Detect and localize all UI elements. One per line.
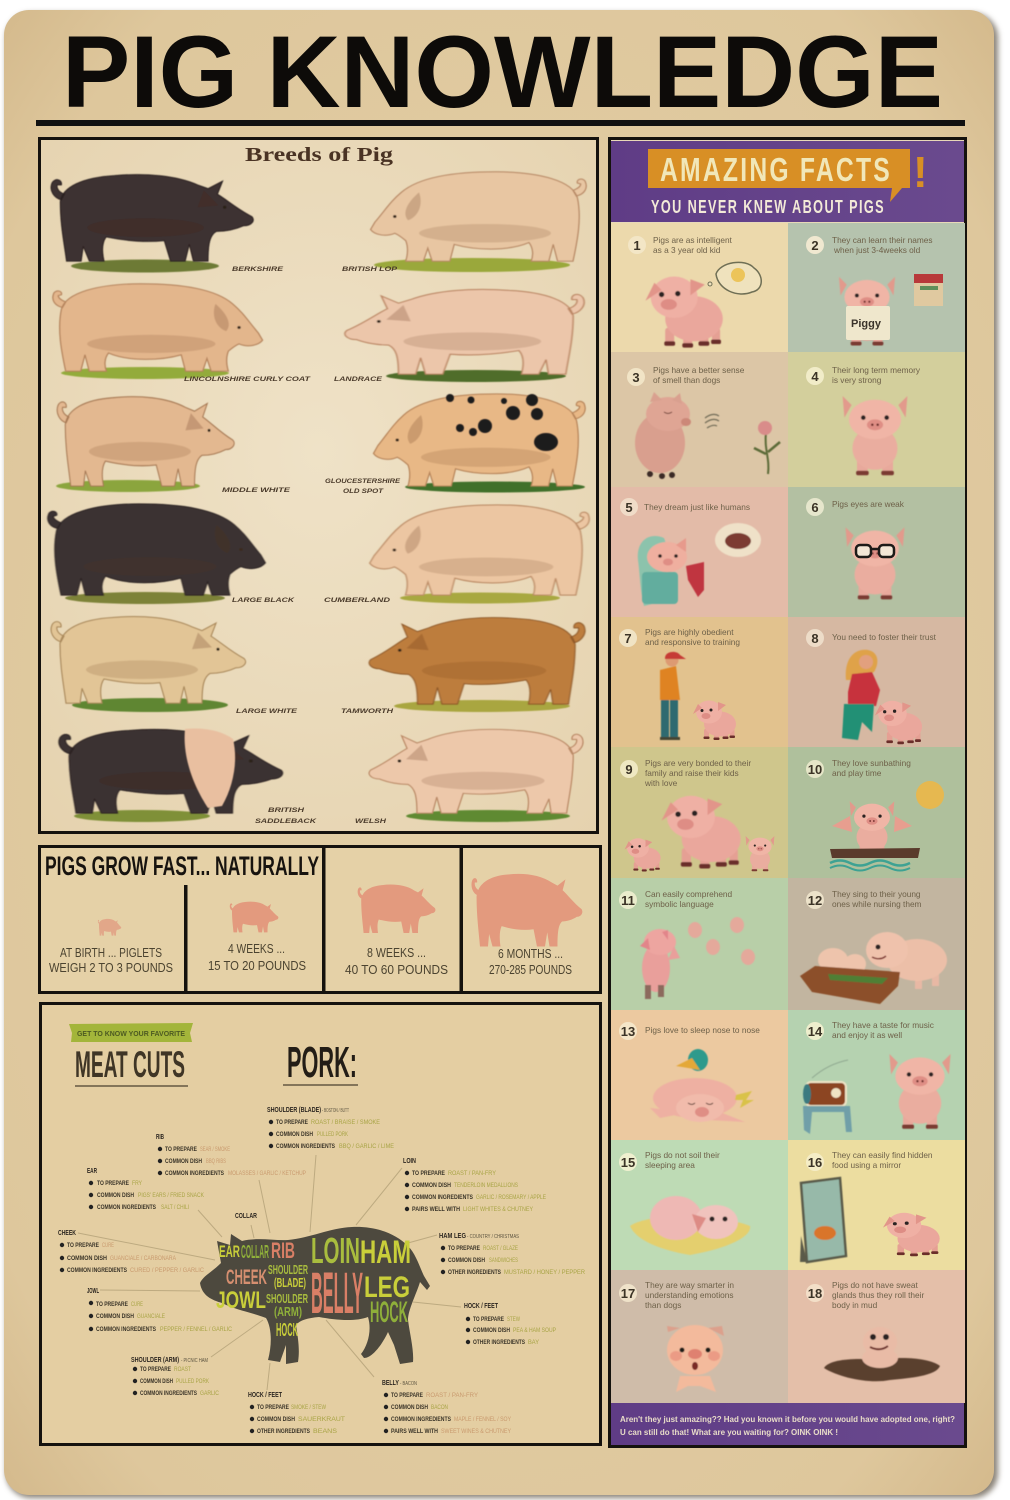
fact 12: [788, 878, 965, 1010]
header: amazing facts banner: !: [913, 148, 928, 197]
callout: ham leg: TO PREPARE: [448, 1245, 480, 1252]
pig: gloucestershire old spot: OLD SPOT: [343, 488, 384, 495]
heading: breeds of pig: Breeds of Pig: [245, 144, 394, 166]
callout: rib: COMMON INGREDIENTS: [165, 1170, 225, 1177]
fact 16: [788, 1140, 965, 1270]
callout: shoulder arm: ROAST: [174, 1367, 191, 1373]
callout: belly: TO PREPARE: [391, 1392, 423, 1399]
callout: jowl: COMMON INGREDIENTS: [96, 1326, 157, 1333]
callout: shoulder arm: - PICNIC HAM: [181, 1358, 208, 1364]
diagram: pork cuts pig: SHOULDER: [268, 1262, 308, 1277]
callout: cheek: GUANCIALE / CARBONARA: [110, 1256, 176, 1262]
callout: belly: PAIRS WELL WITH: [391, 1428, 438, 1435]
callout: shoulder arm: COMMON DISH: [140, 1378, 173, 1385]
callout: belly: MAPLE / FENNEL / SOY: [454, 1417, 511, 1423]
pig: welsh: [355, 729, 583, 825]
fact 9: family and raise their kids: [645, 768, 739, 778]
fact 9: Pigs are very bonded to their: [645, 758, 751, 768]
growth stage: 6 months: 270-285 POUNDS: [489, 962, 572, 977]
growth stage: at birth: AT BIRTH ... PIGLETS: [60, 945, 162, 960]
diagram: pork cuts pig: [200, 1227, 430, 1364]
fact 2: 2: [811, 238, 819, 253]
fact 12: They sing to their young: [832, 889, 921, 899]
callout: cheek: COMMON DISH: [67, 1255, 107, 1262]
pig: berkshire: BERKSHIRE: [232, 266, 284, 273]
callout: ear: PIGS' EARS / FRIED SNACK: [138, 1193, 204, 1199]
callout: ham leg: - COUNTRY / CHRISTMAS: [467, 1234, 520, 1240]
diagram: pork cuts pig: (BLADE): [274, 1275, 306, 1290]
growth stage: 4 weeks: [208, 902, 306, 973]
callout: shoulder blade: PULLED PORK: [317, 1132, 348, 1138]
fact 2: when just 3-4weeks old: [833, 245, 921, 255]
fact 14: They have a taste for music: [832, 1020, 934, 1030]
callout: hock feet right: [464, 1303, 556, 1346]
callout: ham leg: MUSTARD / HONEY / PEPPER: [504, 1270, 586, 1276]
callout: shoulder blade: COMMON DISH: [276, 1131, 313, 1138]
fact 5: They dream just like humans: [644, 502, 750, 512]
callout: ear: [87, 1168, 204, 1211]
diagram: pork cuts pig: HAM: [360, 1234, 411, 1270]
diagram: pork cuts pig: HOCK: [370, 1296, 408, 1329]
fact 9: with love: [644, 778, 678, 788]
growth stage: at birth: WEIGH 2 TO 3 POUNDS: [49, 960, 173, 975]
panel: amazing facts: [610, 138, 966, 1446]
fact 15: Pigs do not soil their: [645, 1150, 720, 1160]
diagram: pork cuts pig: LEG: [364, 1271, 410, 1304]
callout: hock feet lower: TO PREPARE: [257, 1404, 289, 1411]
callout: cheek: CURE: [102, 1243, 114, 1249]
pig: british lop: BRITISH LOP: [342, 266, 398, 273]
fact 17: [611, 1270, 788, 1403]
callout: loin: TENDERLOIN MEDALLIONS: [454, 1183, 518, 1189]
fact 14: and enjoy it as well: [832, 1030, 902, 1040]
fact 11: symbolic language: [645, 899, 714, 909]
callout: ham leg: OTHER INGREDIENTS: [448, 1269, 502, 1276]
fact 2: [788, 223, 965, 352]
fact 16: They can easily find hidden: [832, 1150, 933, 1160]
fact 1: as a 3 year old kid: [653, 245, 721, 255]
callout: loin: TO PREPARE: [412, 1170, 446, 1177]
growth stage: 8 weeks: [345, 885, 448, 977]
callout: ham leg: ROAST / GLAZE: [483, 1246, 518, 1252]
fact 18: glands thus they roll their: [832, 1290, 924, 1300]
pig: lincolnshire curly coat: LINCOLNSHIRE CURLY COAT: [184, 376, 311, 383]
title: PIG KNOWLEDGE: [62, 15, 943, 129]
pig: large black: [48, 504, 296, 604]
callout: jowl: CURE: [131, 1302, 143, 1308]
callout: ear: FRY: [132, 1181, 142, 1187]
fact 17: 17: [621, 1286, 635, 1301]
fact 2: Piggy: [851, 318, 882, 330]
diagram: pork cuts pig: LOIN: [311, 1230, 360, 1271]
fact 13: 13: [621, 1024, 635, 1039]
footer message: U can still do that! What are you waiting for? OINK OINK !: [620, 1428, 838, 1437]
fact 6: [788, 487, 965, 617]
fact 10: [788, 747, 965, 878]
header: amazing facts banner: YOU NEVER KNEW ABOUT PIGS: [651, 197, 885, 217]
callout: hock feet right: STEW: [507, 1317, 520, 1323]
growth stage: at birth: [49, 919, 173, 975]
pig: large white: LARGE WHITE: [236, 708, 298, 715]
callout: belly: - BACON: [400, 1381, 417, 1387]
fact 17: They are way smarter in: [645, 1280, 734, 1290]
callout: ear: SALT / CHILI: [161, 1205, 189, 1211]
callout: ear: EAR: [87, 1168, 97, 1175]
pig: cumberland: [324, 505, 589, 604]
callout: shoulder arm: PULLED PORK: [176, 1379, 209, 1385]
callout: hock feet lower: OTHER INGREDIENTS: [257, 1428, 311, 1435]
footer message: Aren't they just amazing?? Had you known it before you would have adopted one, right?: [620, 1415, 955, 1424]
fact 4: [788, 352, 965, 487]
diagram: pork cuts pig: JOWL: [216, 1287, 266, 1314]
callout: belly: BELLY: [382, 1380, 399, 1387]
callout: rib: TO PREPARE: [165, 1146, 197, 1153]
callout: loin: LOIN: [403, 1158, 416, 1165]
pig: lincolnshire curly coat: [53, 284, 311, 383]
fact 10: and play time: [832, 768, 882, 778]
header: amazing facts banner: [611, 141, 964, 222]
fact 4: Their long term memory: [832, 365, 921, 375]
callout: loin: LIGHT WHITES & CHUTNEY: [463, 1207, 533, 1213]
diagram: pork cuts pig: HOCK: [276, 1320, 298, 1340]
diagram: pork cuts pig: RIB: [271, 1238, 295, 1263]
callout: cheek: TO PREPARE: [67, 1242, 99, 1249]
callout: belly: COMMON DISH: [391, 1404, 428, 1411]
pig: cumberland: CUMBERLAND: [324, 597, 390, 604]
fact 8: You need to foster their trust: [832, 632, 937, 642]
pig: middle white: MIDDLE WHITE: [222, 487, 291, 494]
callout: rib: RIB: [156, 1134, 164, 1141]
callout: jowl: TO PREPARE: [96, 1301, 128, 1308]
fact 15: [611, 1140, 788, 1270]
pig: tamworth: TAMWORTH: [341, 708, 393, 715]
callout: belly: ROAST / PAN-FRY: [426, 1393, 478, 1399]
callout: belly: BACON: [431, 1405, 448, 1411]
callout: shoulder arm: GARLIC: [200, 1391, 220, 1397]
fact 8: [788, 617, 965, 747]
callout: jowl: COMMON DISH: [96, 1313, 134, 1320]
pig: large black: LARGE BLACK: [232, 597, 296, 604]
fact 11: 11: [621, 893, 635, 908]
callout: hock feet right: BAY: [528, 1340, 539, 1346]
fact 12: ones while nursing them: [832, 899, 922, 909]
fact 17: understanding emotions: [645, 1290, 734, 1300]
callout: belly: [382, 1380, 511, 1435]
fact 4: is very strong: [832, 375, 882, 385]
fact 5: 5: [625, 500, 633, 515]
fact 5: [611, 487, 788, 617]
callout: collar: COLLAR: [235, 1213, 257, 1220]
callout: ear: TO PREPARE: [97, 1180, 129, 1187]
panel: breeds of pig: [40, 138, 598, 832]
callout: hock feet lower: SAUERKRAUT: [298, 1417, 345, 1423]
diagram: pork cuts pig: COLLAR: [241, 1242, 269, 1262]
callout: cheek: COMMON INGREDIENTS: [67, 1267, 128, 1274]
callout: shoulder blade: [267, 1107, 394, 1150]
callout: hock feet lower: HOCK / FEET: [248, 1392, 283, 1399]
callout: jowl: PEPPER / FENNEL / GARLIC: [160, 1327, 233, 1333]
callout: loin: COMMON DISH: [412, 1182, 451, 1189]
fact 18: 18: [808, 1286, 822, 1301]
callout: shoulder blade: COMMON INGREDIENTS: [276, 1143, 336, 1150]
callout: rib: MOLASSES / GARLIC / KETCHUP: [228, 1171, 306, 1177]
callout: hock feet right: PEA & HAM SOUP: [513, 1328, 556, 1334]
fact 11: Can easily comprehend: [645, 889, 733, 899]
pig: gloucestershire old spot: [325, 394, 585, 495]
fact 14: 14: [808, 1024, 823, 1039]
callout: ham leg: SANDWICHES: [489, 1258, 518, 1264]
panel: pork meat cuts: [40, 1004, 600, 1444]
fact 9: [611, 747, 788, 878]
fact 13: Pigs love to sleep nose to nose: [645, 1025, 760, 1035]
panel: pigs grow fast naturally: [40, 846, 600, 992]
growth stage: 6 months: [471, 874, 582, 977]
fact 1: 1: [633, 238, 641, 253]
callout: loin: ROAST / PAN-FRY: [448, 1171, 496, 1177]
pig: british saddleback: BRITISH: [268, 807, 304, 814]
callout: shoulder blade: ROAST / BRAISE / SMOKE: [311, 1120, 380, 1126]
pig: british lop: [342, 172, 586, 273]
fact 10: 10: [808, 762, 822, 777]
fact 8: 8: [811, 631, 819, 646]
fact 16: 16: [808, 1155, 822, 1170]
pig: berkshire: [51, 175, 284, 273]
growth stage: 8 weeks: 8 WEEKS ...: [367, 945, 426, 960]
callout: cheek: CHEEK: [58, 1230, 76, 1237]
fact 17: than dogs: [645, 1300, 681, 1310]
fact 3: Pigs have a better sense: [653, 365, 745, 375]
fact 7: 7: [624, 631, 632, 646]
fact 7: Pigs are highly obedient: [645, 627, 734, 637]
callout: jowl: GUANCIALE: [137, 1314, 165, 1320]
diagram: pork cuts pig: CHEEK: [226, 1266, 267, 1289]
callout: hock feet right: HOCK / FEET: [464, 1303, 499, 1310]
fact 9: 9: [625, 762, 633, 777]
fact 1: [611, 223, 788, 352]
fact 13: [611, 1010, 788, 1140]
diagram: pork cuts pig: SHOULDER: [266, 1291, 308, 1306]
banner: get to know your favorite: GET TO KNOW YOUR FAVORITE: [77, 1031, 185, 1038]
callout: ear: COMMON INGREDIENTS: [97, 1204, 157, 1211]
pig: landrace: LANDRACE: [334, 376, 383, 383]
fact 11: [611, 878, 788, 1010]
callout: belly: SWEET WINES & CHUTNEY: [441, 1429, 511, 1435]
callout: shoulder arm: TO PREPARE: [140, 1366, 171, 1373]
diagram: pork cuts pig: EAR: [219, 1242, 240, 1261]
callout: shoulder arm: SHOULDER (ARM): [131, 1357, 179, 1364]
callout: shoulder arm: COMMON INGREDIENTS: [140, 1390, 197, 1397]
fact 18: [788, 1270, 965, 1403]
banner: get to know your favorite: [69, 1023, 193, 1042]
fact 7: [611, 617, 788, 747]
footer message: [611, 1403, 964, 1445]
growth stage: 8 weeks: 40 TO 60 POUNDS: [345, 962, 448, 977]
pig: british saddleback: SADDLEBACK: [255, 818, 318, 825]
fact 6: Pigs eyes are weak: [832, 499, 905, 509]
growth stage: 4 weeks: 15 TO 20 POUNDS: [208, 958, 306, 973]
callout: jowl: [87, 1288, 233, 1333]
pig: gloucestershire old spot: GLOUCESTERSHIRE: [325, 478, 401, 485]
callout: loin: GARLIC / ROSEMARY / APPLE: [476, 1195, 546, 1201]
callout: hock feet lower: SMOKE / STEW: [291, 1405, 326, 1411]
fact 10: They love sunbathing: [832, 758, 911, 768]
callout: rib: [156, 1134, 306, 1177]
callout: hock feet right: TO PREPARE: [473, 1316, 504, 1323]
heading: pigs grow fast: PIGS GROW FAST... NATURALLY: [45, 851, 319, 881]
fact 15: 15: [621, 1155, 635, 1170]
pig: large white: [51, 617, 298, 715]
pig: british saddleback: [59, 728, 318, 825]
callout: jowl: JOWL: [87, 1288, 99, 1295]
callout: belly: COMMON INGREDIENTS: [391, 1416, 452, 1423]
fact 12: 12: [808, 893, 822, 908]
callout: hock feet lower: [248, 1392, 345, 1435]
pig: tamworth: [341, 618, 585, 715]
pig: welsh: WELSH: [355, 818, 386, 825]
pig: landrace: [334, 289, 584, 383]
callout: rib: BBQ RIBS: [206, 1159, 226, 1165]
fact 2: They can learn their names: [832, 235, 933, 245]
fact 1: Pigs are as intelligent: [653, 235, 733, 245]
callout: ham leg: COMMON DISH: [448, 1257, 485, 1264]
fact 3: [611, 352, 788, 487]
callout: shoulder blade: SHOULDER (BLADE): [267, 1107, 321, 1114]
fact 3: of smell than dogs: [653, 375, 720, 385]
diagram: pork cuts pig: BELLY: [311, 1261, 363, 1326]
callout: hock feet right: OTHER INGREDIENTS: [473, 1339, 525, 1346]
callout: shoulder blade: TO PREPARE: [276, 1119, 308, 1126]
callout: ear: COMMON DISH: [97, 1192, 134, 1199]
callout: cheek: CURED / PEPPER / GARLIC: [130, 1268, 205, 1274]
callout: hock feet lower: BEANS: [313, 1429, 337, 1435]
callout: ham leg: [439, 1233, 586, 1276]
fact 6: 6: [811, 500, 819, 515]
fact 16: food using a mirror: [832, 1160, 901, 1170]
fact 14: [788, 1010, 965, 1140]
panel: pork meat cuts: PORK:: [287, 1038, 357, 1087]
callout: hock feet right: COMMON DISH: [473, 1327, 510, 1334]
callout: loin: COMMON INGREDIENTS: [412, 1194, 474, 1201]
header: amazing facts banner: AMAZING FACTS: [660, 151, 892, 188]
callout: cheek: [58, 1230, 205, 1274]
callout: hock feet lower: COMMON DISH: [257, 1416, 295, 1423]
fact 4: 4: [811, 369, 819, 384]
fact 18: body in mud: [832, 1300, 878, 1310]
growth stage: 4 weeks: 4 WEEKS ...: [228, 941, 285, 956]
fact 15: sleeping area: [645, 1160, 695, 1170]
callout: rib: COMMON DISH: [165, 1158, 202, 1165]
fact 3: 3: [632, 370, 640, 385]
growth stage: 6 months: 6 MONTHS ...: [498, 946, 563, 961]
fact 18: Pigs do not have sweat: [832, 1280, 918, 1290]
callout: shoulder blade: BBQ / GARLIC / LIME: [339, 1144, 394, 1150]
heading: meat cuts: MEAT CUTS: [75, 1044, 185, 1085]
callout: loin: [403, 1158, 546, 1213]
pig: middle white: [56, 397, 291, 494]
diagram: pork cuts pig: (ARM): [274, 1304, 302, 1319]
callout: shoulder blade: - BOSTON / BUTT: [322, 1108, 349, 1114]
callout: ham leg: HAM LEG: [439, 1233, 466, 1240]
callout: shoulder arm: [131, 1357, 220, 1397]
callout: rib: SEAR / SMOKE: [200, 1147, 230, 1153]
callout: loin: PAIRS WELL WITH: [412, 1206, 460, 1213]
fact 7: and responsive to training: [645, 637, 740, 647]
